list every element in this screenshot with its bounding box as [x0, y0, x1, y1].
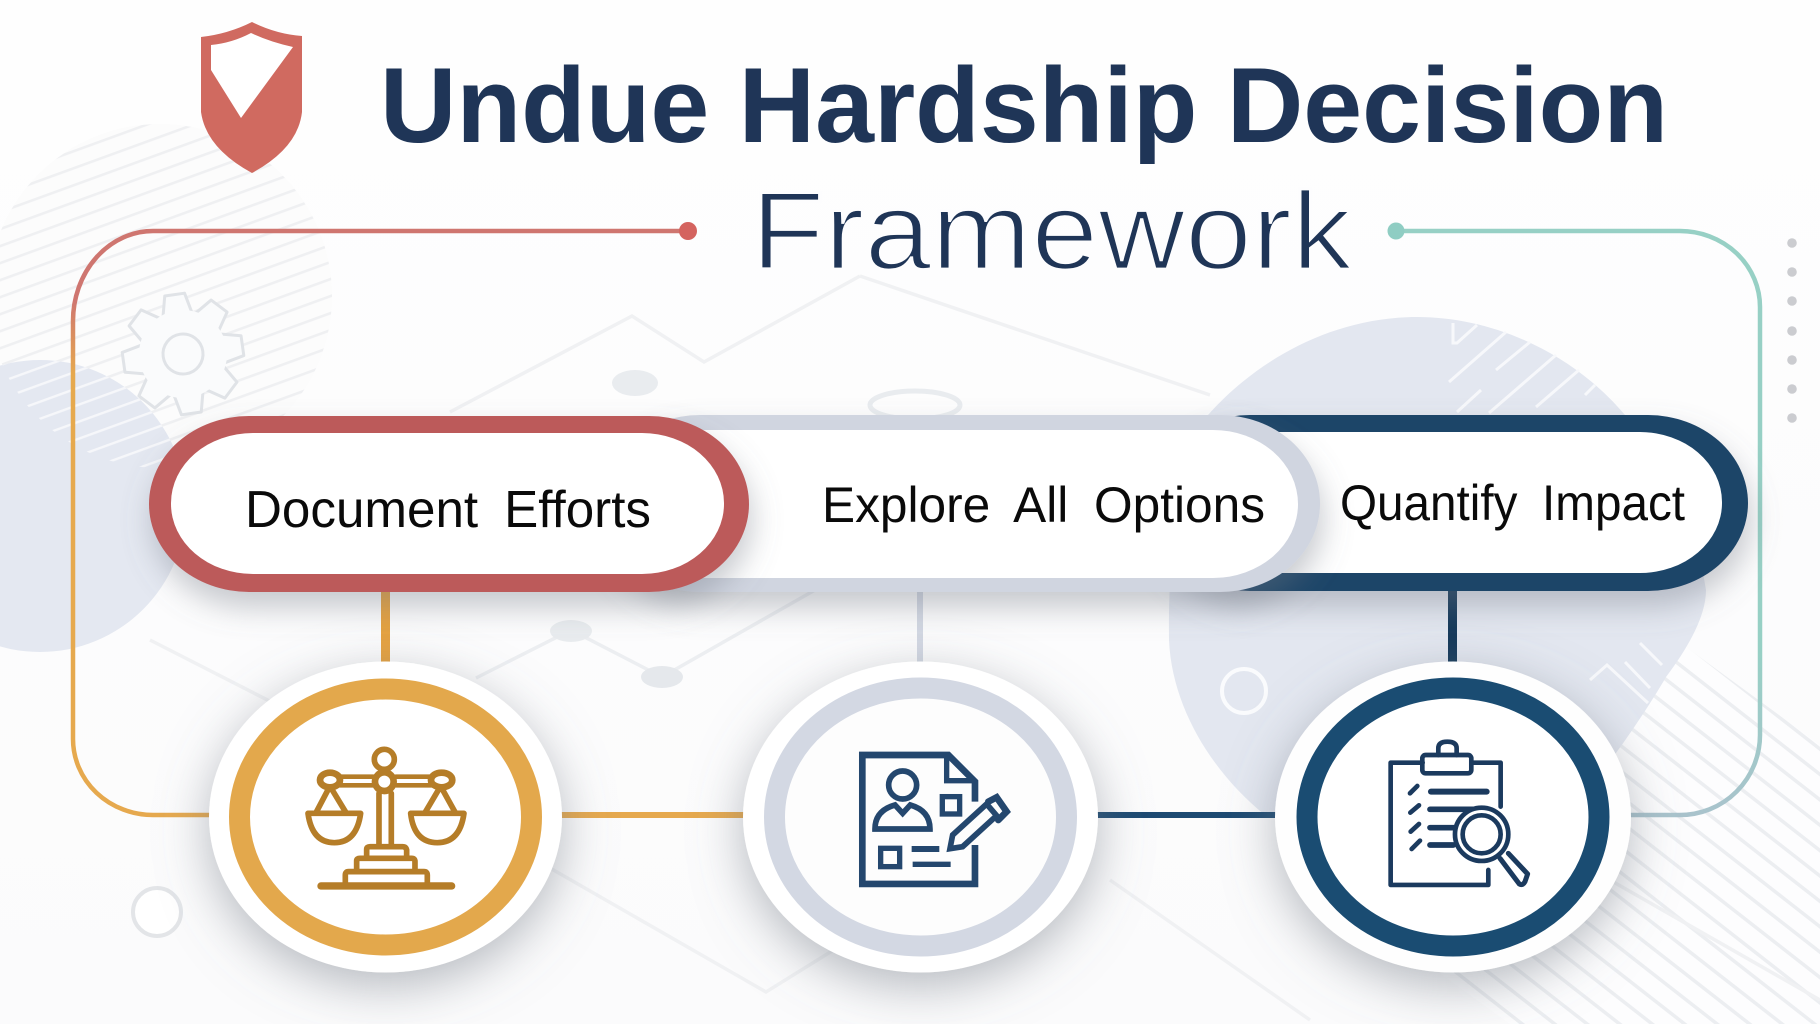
decorative dots column	[1787, 238, 1797, 423]
icon: clipboard with magnifier	[1391, 742, 1528, 885]
icon: shield	[201, 22, 302, 173]
step circle: scales of justice	[209, 662, 562, 972]
title: Undue Hardship Decision	[380, 45, 1668, 165]
icon: gear	[115, 286, 251, 422]
step circle: clipboard review	[1275, 662, 1631, 972]
connector: orange horizontal	[560, 812, 746, 818]
title: Framework	[751, 170, 1353, 293]
connector: navy vertical	[1448, 590, 1457, 665]
step pill: Explore All Options: Explore All Options	[822, 477, 1265, 533]
step pill: Explore All Options	[600, 415, 1320, 592]
step pill: Document Efforts	[149, 416, 749, 592]
icon: scales	[308, 749, 464, 886]
step circle: profile document	[743, 662, 1098, 972]
framework outline left	[73, 231, 688, 815]
title	[380, 45, 1668, 293]
step pill: Quantify Impact: Quantify Impact	[1340, 475, 1685, 531]
step pill: Quantify Impact	[1150, 415, 1748, 591]
node: red dot	[679, 222, 697, 240]
step pill: Document Efforts: Document Efforts	[245, 481, 651, 539]
node: teal dot	[1388, 222, 1404, 240]
connector: orange vertical	[381, 590, 390, 665]
connector: navy horizontal	[1095, 812, 1278, 818]
framework outline right	[1396, 231, 1760, 815]
connector: grey vertical	[917, 590, 923, 665]
icon: profile document with pen	[862, 755, 1007, 884]
